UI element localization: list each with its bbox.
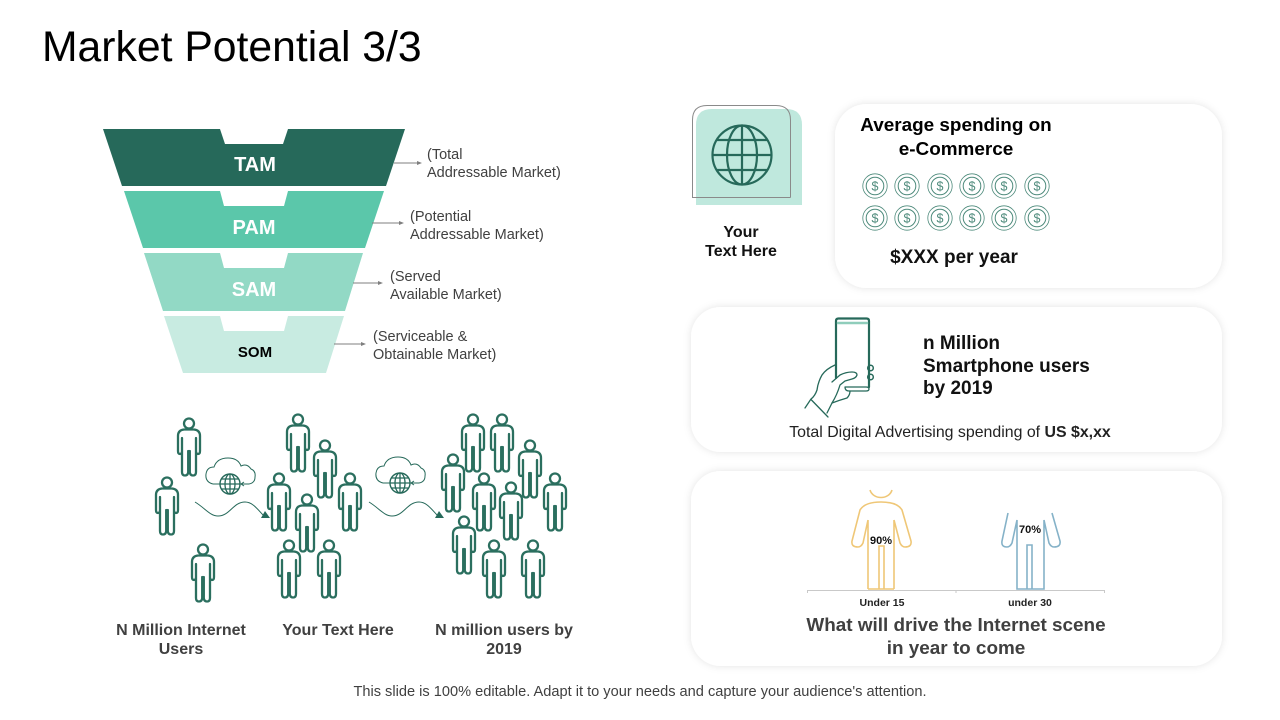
funnel labels with arrows	[334, 147, 561, 363]
label: SOM	[334, 329, 496, 363]
label: SAM	[353, 269, 502, 303]
funnel tier: TAM	[103, 129, 405, 186]
icon tile: globe	[692, 106, 802, 205]
funnel tier: PAM	[124, 191, 384, 248]
label: under 30: under 30	[1008, 597, 1052, 609]
value: per year: $XXX per year	[890, 247, 1019, 268]
caption: users by 2019: N million users by	[435, 622, 573, 639]
heading: average spending: Average spending on	[860, 115, 1052, 136]
funnel tier: PAM: PAM	[233, 217, 275, 239]
text: smartphone users: by 2019	[923, 378, 993, 399]
label: SAM: (Served	[390, 269, 441, 285]
text: what will drive: What will drive the Internet scene	[806, 615, 1106, 636]
footer note: This slide is 100% editable. Adapt it to your needs and capture your audience's attention.	[353, 684, 927, 700]
icon grid: coins	[863, 174, 1049, 230]
label: under 15: Under 15	[860, 597, 905, 609]
text: smartphone users: Smartphone users	[923, 356, 1090, 377]
people captions	[116, 622, 573, 658]
caption: your text: Your Text Here	[282, 622, 394, 639]
label: SOM: Obtainable Market)	[373, 347, 496, 363]
caption: internet users: Users	[159, 641, 203, 658]
label: 70%: 70%	[1019, 524, 1041, 536]
label: PAM: Addressable Market)	[410, 227, 544, 243]
icon: cloud globe 2	[376, 457, 425, 493]
funnel: market tiers	[103, 129, 405, 373]
label: SAM: Available Market)	[390, 287, 502, 303]
people group: users by 2019	[442, 414, 566, 598]
heading: average spending: e-Commerce	[899, 139, 1013, 160]
text: what will drive: in year to come	[887, 638, 1025, 659]
figure: under 30, 70%	[1002, 513, 1060, 589]
label: SOM: (Serviceable &	[373, 329, 468, 345]
arrow: wave 1	[195, 502, 270, 518]
panel: e-commerce spending	[835, 104, 1222, 288]
caption: users by 2019: 2019	[486, 641, 522, 658]
icon: hand holding phone	[805, 318, 873, 417]
label: PAM	[372, 209, 544, 243]
funnel tier: TAM: TAM	[234, 154, 276, 176]
text: digital advertising: Total Digital Advertising spending of US $x,xx	[789, 424, 1111, 441]
people group: internet users	[156, 418, 214, 602]
funnel tier: SOM: SOM	[238, 344, 272, 361]
label: 90%: 90%	[870, 535, 892, 547]
people group: middle	[268, 414, 361, 598]
funnel tier: SOM	[164, 316, 344, 373]
title: Market Potential 3/3	[42, 23, 422, 71]
funnel tier: SAM	[144, 253, 363, 311]
axis	[808, 590, 1104, 593]
text: smartphone users: n Million	[923, 333, 1000, 354]
arrow: wave 2	[369, 502, 444, 518]
chart: age pictograms	[808, 490, 1104, 609]
icon: cloud globe 1	[206, 458, 255, 494]
funnel tier: SAM: SAM	[232, 279, 276, 301]
label: PAM: (Potential	[410, 209, 471, 225]
caption: internet users: N Million Internet	[116, 622, 246, 639]
caption: your text here: Text Here	[705, 243, 777, 260]
label: TAM: (Total	[427, 147, 462, 163]
caption: your text here: Your	[723, 224, 759, 241]
label: TAM	[394, 147, 561, 181]
figure: under 15, 90%	[852, 490, 911, 589]
panel: smartphone users	[691, 307, 1222, 452]
panel: internet drivers	[691, 471, 1222, 666]
label: TAM: Addressable Market)	[427, 165, 561, 181]
